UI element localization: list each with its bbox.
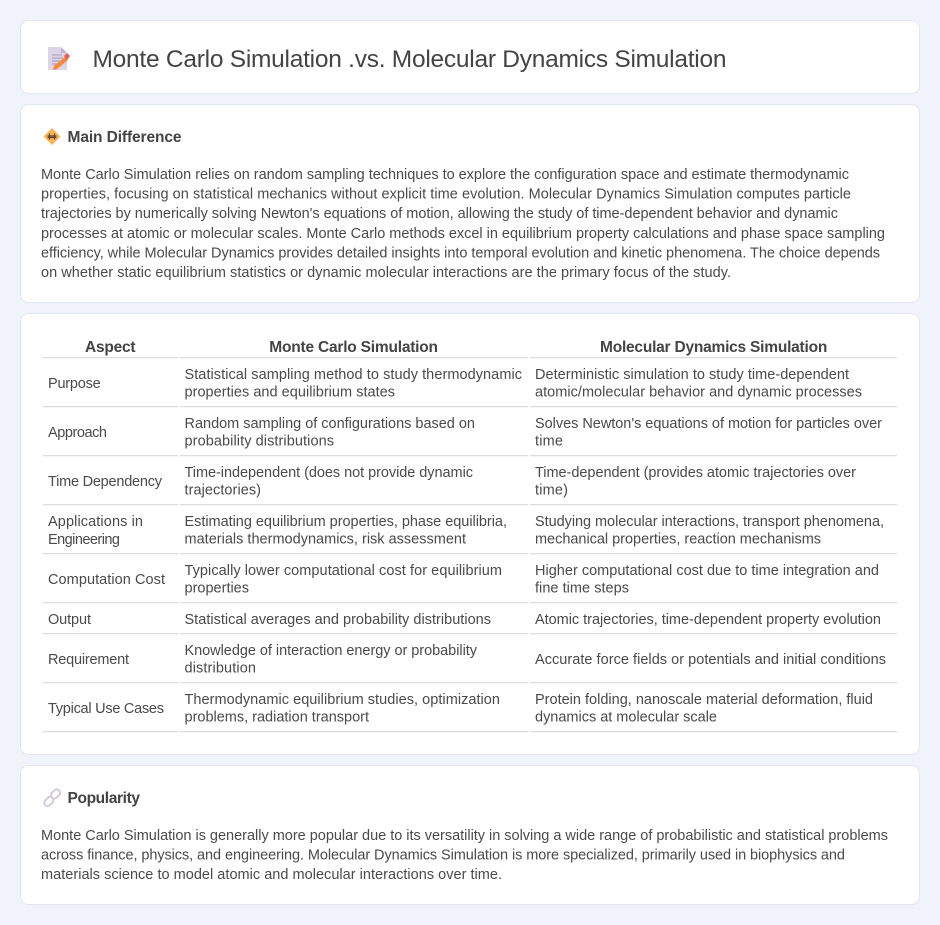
row: purpose: Statistical sampling method to study thermodynamic xyxy=(184,367,522,383)
row: requirement: Accurate force fields or potentials and initial conditions xyxy=(535,652,886,668)
row: requirement xyxy=(43,643,897,683)
row: computation cost: Typically lower computational cost for equilibrium xyxy=(184,563,502,579)
row: purpose: atomic/molecular behavior and dynamic processes xyxy=(535,384,862,400)
row: typical use cases: dynamics at molecular scale xyxy=(535,710,717,726)
row: approach: time xyxy=(535,434,563,450)
row: output xyxy=(43,612,897,634)
row: typical use cases: Typical Use Cases xyxy=(48,701,164,717)
text block: popularity paragraph: materials science to model atomic and molecular interactions over time. xyxy=(41,867,502,883)
row: approach: Approach xyxy=(48,425,107,441)
icon: document with pencil xyxy=(48,47,70,70)
text block: main difference paragraph: trajectories by numerically solving Newton's equations of motion, allowing the study of time-dependent behavior and dynamic xyxy=(41,206,838,222)
row: output: Statistical averages and probability distributions xyxy=(184,612,491,628)
table header row: Molecular Dynamics Simulation xyxy=(600,339,827,356)
row: purpose: Deterministic simulation to study time-dependent xyxy=(535,367,849,383)
text block: popularity paragraph: Monte Carlo Simulation is generally more popular due to its versatility in solving a wide range of probabilistic and statistical problems xyxy=(41,828,888,844)
row: time dependency: trajectories) xyxy=(184,482,261,498)
row: purpose: properties and equilibrium states xyxy=(184,384,395,400)
row: output: Atomic trajectories, time-dependent property evolution xyxy=(535,612,881,628)
row: applications in engineering: Applications in xyxy=(48,514,143,530)
table header row: Aspect xyxy=(85,339,136,356)
text block: main difference paragraph: processes at atomic or molecular scales. Monte Carlo methods excel in equilibrium property calculations and phase space sampling xyxy=(41,226,885,242)
row: typical use cases xyxy=(43,692,897,732)
row: applications in engineering: Studying molecular interactions, transport phenomena, xyxy=(535,514,884,530)
row: typical use cases: Thermodynamic equilibrium studies, optimization xyxy=(184,692,500,708)
row: typical use cases: problems, radiation transport xyxy=(184,710,369,726)
row: typical use cases: Protein folding, nanoscale material deformation, fluid xyxy=(535,692,873,708)
text block: popularity paragraph: across finance, physics, and engineering. Molecular Dynamics Simulation is more specialized, primarily used in biophysics and xyxy=(41,848,845,864)
text block: main difference paragraph xyxy=(41,167,885,281)
text block: popularity paragraph xyxy=(41,828,888,883)
row: approach: Solves Newton's equations of motion for particles over xyxy=(535,416,882,432)
row: purpose xyxy=(43,367,897,407)
icon: chain link xyxy=(43,788,61,807)
panel: main difference xyxy=(20,104,920,302)
panel: popularity xyxy=(20,766,920,904)
row: applications in engineering: mechanical properties, reaction mechanisms xyxy=(535,532,821,548)
table header row xyxy=(43,339,897,358)
row: approach: probability distributions xyxy=(184,434,334,450)
row: computation cost: Computation Cost xyxy=(48,572,165,588)
row: applications in engineering: Engineering xyxy=(48,532,120,548)
row: output: Output xyxy=(48,612,91,628)
text block: main difference paragraph: efficiency, while Molecular Dynamics provides detailed insights into temporal evolution and kinetic phenomena. The choice depends xyxy=(41,245,880,261)
row: time dependency: Time Dependency xyxy=(48,474,163,490)
row: requirement: Requirement xyxy=(48,652,129,668)
row: time dependency: Time-dependent (provides atomic trajectories over xyxy=(535,465,856,481)
row: approach: Random sampling of configurations based on xyxy=(184,416,475,432)
row: computation cost: fine time steps xyxy=(535,580,629,596)
row: applications in engineering xyxy=(43,514,897,554)
row: computation cost xyxy=(43,563,897,603)
text block: main difference paragraph: on whether static equilibrium statistics or dynamic molecular interactions are the primary focus of the study. xyxy=(41,265,731,281)
table header row: Monte Carlo Simulation xyxy=(269,339,438,356)
row: time dependency: time) xyxy=(535,482,568,498)
icon: warning diamond xyxy=(44,128,60,145)
row: computation cost: properties xyxy=(184,580,249,596)
text block: main difference paragraph: properties, focusing on statistical mechanics without explicit time evolution. Molecular Dynamics Simulation computes particle xyxy=(41,187,851,203)
row: applications in engineering: Estimating equilibrium properties, phase equilibria, xyxy=(184,514,507,530)
row: purpose: Purpose xyxy=(48,376,101,392)
panel: comparison table xyxy=(20,314,920,754)
row: applications in engineering: materials thermodynamics, risk assessment xyxy=(184,532,466,548)
row: approach xyxy=(43,416,897,456)
row: computation cost: Higher computational cost due to time integration and xyxy=(535,563,879,579)
heading: popularity: Popularity xyxy=(68,790,140,807)
row: requirement: distribution xyxy=(184,660,256,676)
row: requirement: Knowledge of interaction energy or probability xyxy=(184,643,478,659)
title: Monte Carlo Simulation .vs. Molecular Dynamics Simulation xyxy=(92,46,726,73)
heading: main difference: Main Difference xyxy=(68,129,182,146)
row: time dependency xyxy=(43,465,897,505)
text block: main difference paragraph: Monte Carlo Simulation relies on random sampling techniques to explore the configuration space and estimate thermodynamic xyxy=(41,167,849,183)
row: time dependency: Time-independent (does not provide dynamic xyxy=(184,465,473,481)
panel: header xyxy=(20,20,920,94)
